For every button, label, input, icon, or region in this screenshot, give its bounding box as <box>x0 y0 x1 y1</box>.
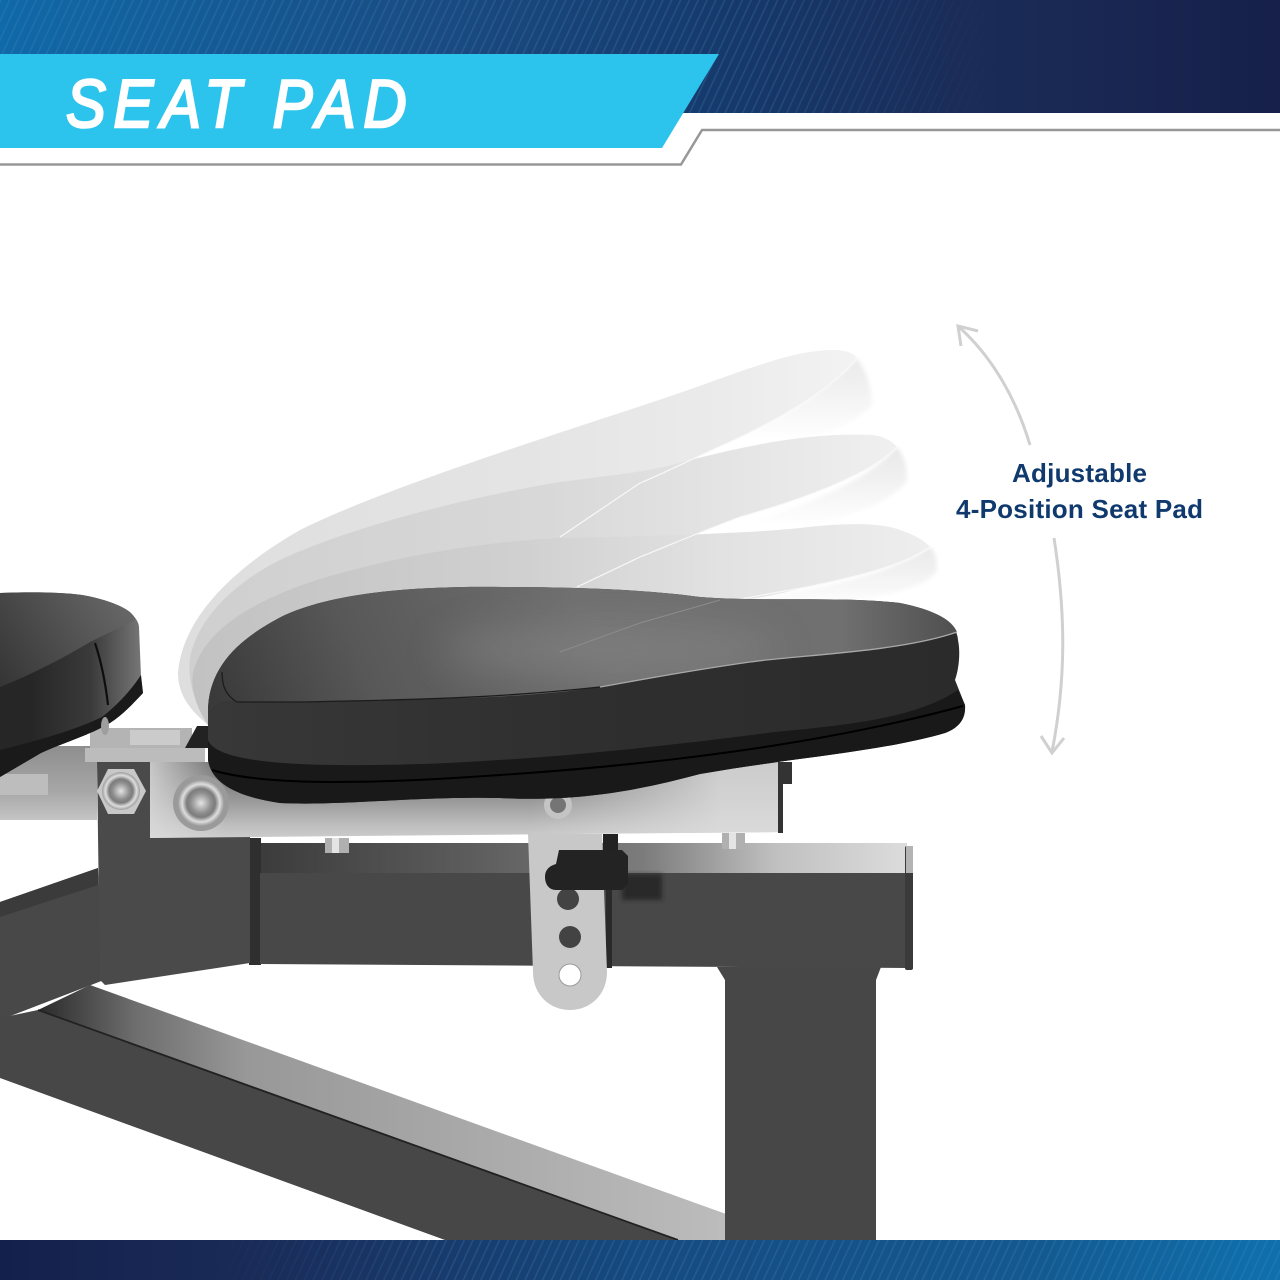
callout label: 4-Position Seat Pad <box>956 494 1203 524</box>
upper diagonal tube <box>0 868 104 1020</box>
beam joint shadow <box>249 838 261 965</box>
left pad snap <box>101 717 109 735</box>
left pad <box>0 592 143 777</box>
header bar <box>0 0 1280 113</box>
ghost pad: highest position <box>178 350 872 725</box>
bolt: centre <box>173 775 229 831</box>
left pad zipper band <box>0 675 143 777</box>
left rail <box>0 726 210 820</box>
lower diagonal tube <box>0 985 726 1240</box>
bolt stub left <box>325 838 349 853</box>
ghost pad: second position <box>192 524 937 725</box>
pad seam stitch <box>222 600 957 702</box>
arrow up <box>958 326 1030 445</box>
title: SEAT PAD <box>66 65 407 142</box>
main beam <box>260 873 907 968</box>
adjuster hole 2 <box>559 926 581 948</box>
frame <box>0 762 913 1240</box>
ghost pad stitching <box>560 358 930 600</box>
pad side <box>208 587 965 804</box>
zipper band <box>208 690 965 804</box>
bolt: left <box>97 769 146 814</box>
beam end cap <box>905 846 913 970</box>
title banner <box>0 54 719 148</box>
adjuster hole 1 <box>557 888 579 910</box>
ghost pad: third position <box>189 435 907 725</box>
adjuster post <box>603 834 618 854</box>
header outline stroke <box>0 130 1280 164</box>
adjuster plate <box>528 834 612 1010</box>
seat bracket <box>150 762 792 838</box>
vertical plate <box>97 762 250 985</box>
footer bar <box>0 1240 1280 1280</box>
callout label: Adjustable <box>1012 458 1147 488</box>
knob shadow on beam <box>622 874 662 900</box>
locking knob <box>545 850 628 890</box>
pad top <box>200 580 970 710</box>
callout <box>956 326 1203 753</box>
callout label <box>956 458 1203 524</box>
adjuster hole 3 <box>559 964 581 986</box>
beam top face <box>250 843 907 873</box>
arrow down <box>1041 538 1064 753</box>
washer under seat <box>544 791 572 819</box>
main seat pad <box>200 580 970 804</box>
bolt stub right <box>722 833 745 849</box>
leg <box>717 967 881 1240</box>
